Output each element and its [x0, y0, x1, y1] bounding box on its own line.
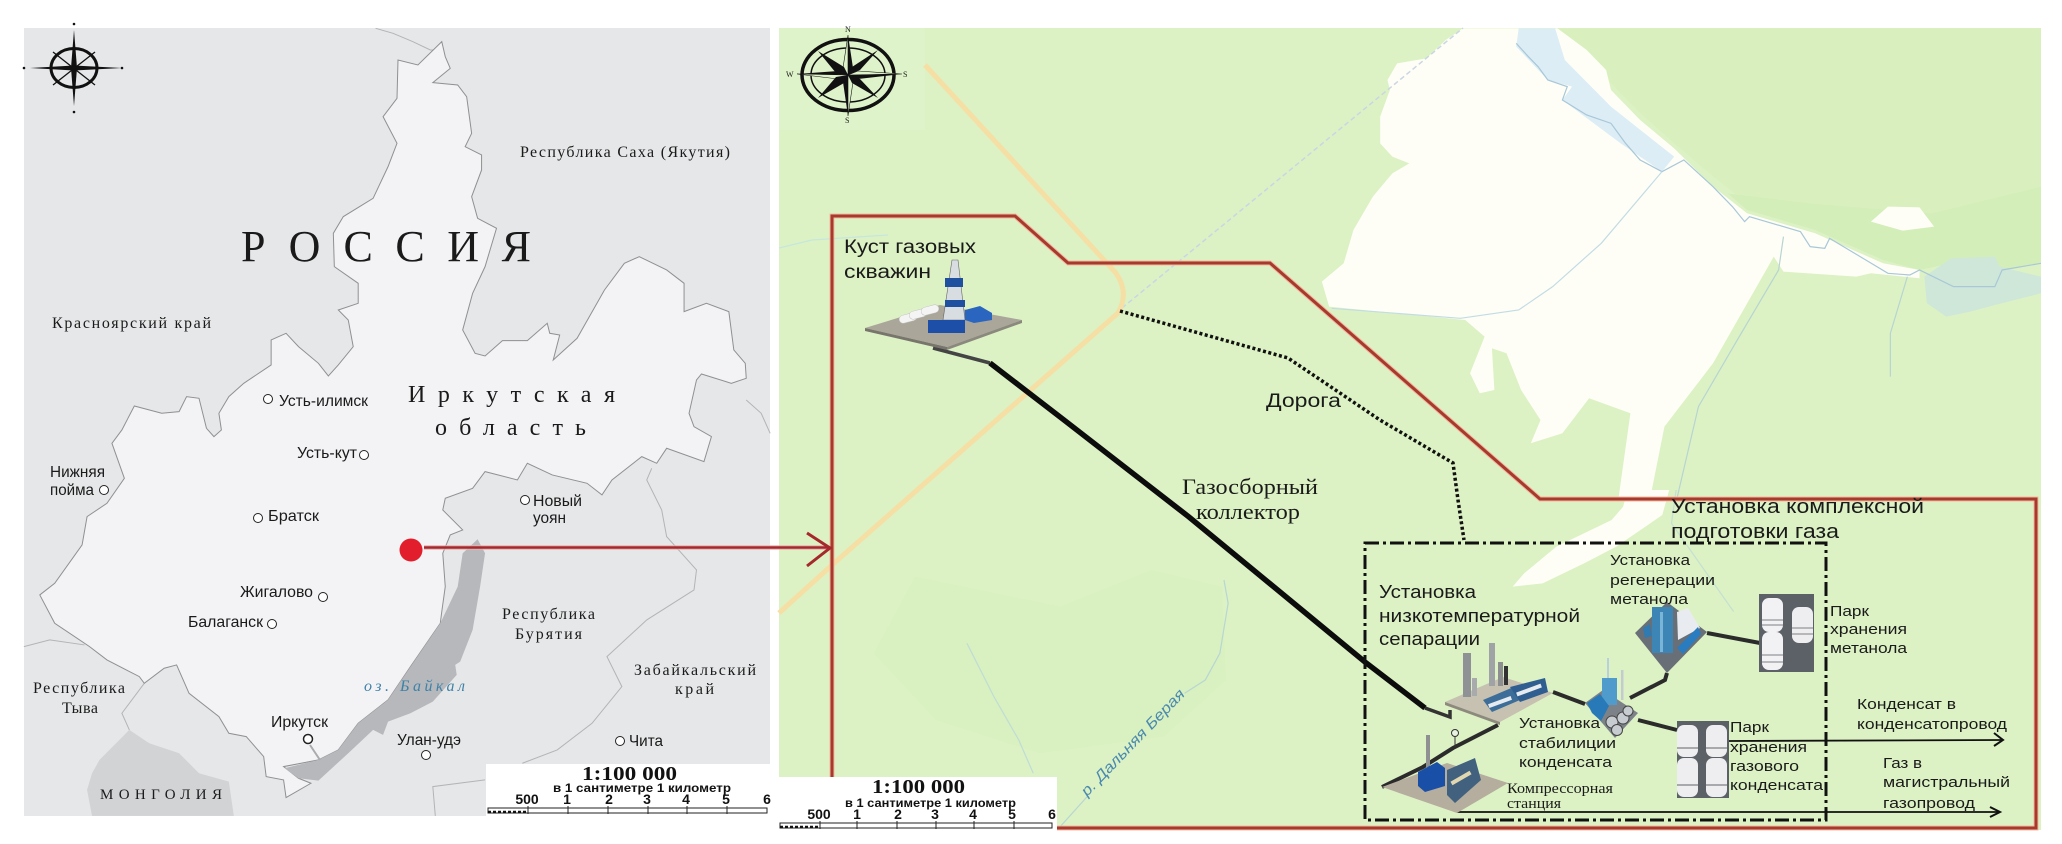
icon: low temperature separation unit: [1445, 643, 1553, 725]
city: Улан-удэ: [397, 732, 461, 760]
dash-dot boundary of gas treatment plant: [1365, 543, 1826, 820]
label: Парк хранения метанола: хранения: [1830, 621, 1907, 638]
compass rose: large: S: [845, 116, 849, 125]
scale: site map: 6: [1048, 806, 1056, 822]
label: Парк хранения газового конденсата: газового: [1730, 758, 1799, 775]
label: Установка комплексной подготовки газа: [1671, 496, 1924, 543]
label: Парк хранения метанола: метанола: [1830, 640, 1908, 657]
city: Новый уоян: [520, 493, 582, 527]
red boundary of licence area: [832, 216, 2036, 828]
city: Улан-удэ: Улан-удэ: [397, 732, 461, 749]
darker forest band along river: [1728, 187, 2041, 270]
city: Иркутск: Иркутск: [271, 714, 329, 731]
region: Mongolia: [87, 730, 234, 816]
scale: regional map: 1: [563, 791, 571, 807]
blue lake: [1516, 28, 1674, 172]
arrow: condensate export: [1729, 733, 2003, 746]
neighbouring borders: [24, 28, 770, 816]
compass rose: large: [786, 25, 907, 125]
compass rose: large: S: [903, 70, 907, 79]
gas gathering pipeline: [933, 348, 1450, 717]
region: Irkutsk oblast: [40, 42, 746, 798]
label: Бурятия: [502, 606, 595, 643]
scale: site map: 4: [969, 806, 977, 822]
label: Установка стабилизации конденсата: стабилиции: [1519, 735, 1616, 752]
city: Чита: [616, 733, 663, 750]
label: Тыва: [33, 680, 125, 717]
heading: Иркутская область: Иркутская: [408, 382, 615, 408]
label: Парк хранения метанола: [1830, 603, 1908, 657]
label: Компрессорная станция: станция: [1507, 796, 1561, 812]
label: Газ в магистральный газопровод: Газ в: [1883, 755, 1922, 772]
label: Парк хранения метанола: Парк: [1830, 603, 1869, 620]
label: Газ в магистральный газопровод: газопровод: [1883, 795, 1975, 812]
label: Парк хранения газового конденсата: [1730, 719, 1824, 794]
lighter patch behind compass: [779, 28, 925, 130]
label: Компрессорная станция: [1507, 781, 1613, 812]
label: Бурятия: Бурятия: [515, 626, 583, 643]
floodplain: lower part: [1513, 490, 1669, 587]
label: Газосборный коллектор: Газосборный: [1182, 474, 1318, 499]
label: Забайкальский край: Забайкальский: [634, 662, 756, 679]
map background: [24, 28, 770, 816]
label: Установка регенерации метанола: метанола: [1610, 591, 1689, 608]
scale: site map: 2: [894, 806, 902, 822]
label: Установка регенерации метанола: регенерации: [1610, 572, 1715, 589]
scale: regional map: 3: [643, 791, 651, 807]
scale: regional map: 6: [763, 791, 771, 807]
heading: Иркутская область: [408, 382, 615, 441]
label: Парк хранения газового конденсата: конденсата: [1730, 777, 1824, 794]
label: Компрессорная станция: Компрессорная: [1507, 781, 1613, 797]
darker forest area: [1558, 28, 2041, 270]
label: Установка стабилизации конденсата: [1519, 715, 1616, 771]
label: Куст газовых скважин: Куст газовых: [844, 237, 977, 258]
label: Установка комплексной подготовки газа: Установка комплексной: [1671, 496, 1924, 518]
city: Новый уоян: уоян: [533, 510, 566, 527]
scale: regional map: 2: [605, 791, 613, 807]
arrow: gas export: [1457, 807, 2000, 817]
scale: regional map: 1:100 000: [582, 763, 677, 785]
scale: site map: [779, 776, 1057, 844]
heading: Россия: РОССИЯ: [241, 222, 531, 271]
label: Тыва: Тыва: [62, 700, 98, 717]
label: Парк хранения газового конденсата: хранения: [1730, 739, 1807, 756]
label: река Дальняя Берая: р. Дальняя Берая: [1077, 686, 1189, 801]
label: Бурятия: Республика: [502, 606, 595, 623]
dotted road: [1120, 311, 1464, 540]
panel: detailed site map: [779, 25, 2041, 844]
scale: regional map: 5: [722, 791, 730, 807]
city: Усть-илимск: Усть-илимск: [279, 393, 369, 410]
label: Газ в магистральный газопровод: магистральный: [1883, 774, 2010, 791]
location marker with arrow to site map: [400, 533, 830, 566]
label: Куст газовых скважин: скважин: [844, 262, 931, 283]
icon: compressor station: [1382, 730, 1508, 813]
scale: site map: в 1 сантиметре 1 километр: [845, 798, 1016, 810]
panel: regional map: [23, 23, 770, 816]
label: Установка регенерации метанола: Установка: [1610, 552, 1691, 569]
wetland: [1924, 257, 2041, 317]
scale: site map: 5: [1008, 806, 1016, 822]
city: Усть-кут: Усть-кут: [297, 445, 358, 462]
city: Чита: Чита: [629, 733, 663, 750]
scale: regional map: в 1 сантиметре 1 километр: [553, 783, 731, 795]
icon: gas well cluster: [865, 260, 1022, 350]
label: Красноярский край: Красноярский край: [52, 315, 211, 332]
label: Газосборный коллектор: [1182, 474, 1318, 524]
icon: methanol regeneration unit: [1635, 602, 1707, 673]
icon: condensate storage tanks: [1677, 721, 1729, 798]
label: Тыва: Республика: [33, 680, 125, 697]
city: Новый уоян: Новый: [533, 493, 582, 510]
lake Baikal: [285, 539, 485, 781]
heading: Иркутская область: область: [435, 415, 586, 441]
label: Дорога: Дорога: [1266, 391, 1342, 412]
city: Нижняя пойма: пойма: [50, 482, 94, 499]
city: Нижняя пойма: Нижняя: [50, 464, 105, 481]
label: Установка стабилизации конденсата: конденсата: [1519, 754, 1613, 771]
city: Иркутск: [271, 714, 329, 760]
scale: regional map: 500: [515, 791, 539, 807]
label: Установка комплексной подготовки газа: подготовки газа: [1671, 521, 1840, 543]
label: Установка низкотемпературной сепарации: Установка: [1379, 582, 1477, 602]
label: Конденсат в конденсатопровод: [1857, 696, 2007, 733]
label: Монголия: МОНГОЛИЯ: [100, 787, 222, 803]
label: Конденсат в конденсатопровод: конденсатопровод: [1857, 716, 2007, 733]
label: Якутия: Республика Саха (Якутия): [520, 144, 730, 161]
label: Установка низкотемпературной сепарации: [1379, 582, 1580, 649]
compass rose: small: [23, 23, 123, 113]
label: Забайкальский край: [634, 662, 756, 698]
label: Установка регенерации метанола: [1610, 552, 1715, 608]
label: Конденсат в конденсатопровод: Конденсат в: [1857, 696, 1956, 713]
scale: site map: 1:100 000: [872, 776, 965, 798]
city: Жигалово: Жигалово: [240, 584, 313, 601]
green terrain background: [779, 28, 2041, 830]
small clearing: [1871, 207, 1934, 231]
city: Братск: Братск: [268, 508, 320, 525]
rivers: [779, 43, 2041, 827]
scale: site map: 1: [853, 806, 861, 822]
icon: methanol storage tanks: [1759, 594, 1814, 672]
label: Установка низкотемпературной сепарации: сепарации: [1379, 629, 1480, 649]
compass rose: large: N: [845, 25, 851, 34]
icon: condensate stabilization unit: [1585, 658, 1638, 738]
connecting pipes: [1382, 633, 1760, 787]
floodplain: white area: [1322, 28, 1920, 500]
label: Парк хранения газового конденсата: Парк: [1730, 719, 1769, 736]
orange highway: [779, 65, 1123, 613]
label: Забайкальский край: край: [675, 681, 714, 698]
label: озеро Байкал: оз. Байкал: [364, 678, 465, 695]
label: Установка низкотемпературной сепарации: низкотемпературной: [1379, 606, 1580, 626]
dashed power line: [1122, 28, 1463, 308]
label: Установка стабилизации конденсата: Установка: [1519, 715, 1601, 732]
darker forest patch south: [874, 570, 1226, 753]
city: Балаганск: Балаганск: [188, 614, 264, 631]
scale: site map: 500: [807, 806, 831, 822]
compass rose: large: W: [786, 70, 794, 79]
scale: regional map: 4: [682, 791, 690, 807]
label: Газосборный коллектор: коллектор: [1196, 499, 1300, 524]
label: Газ в магистральный газопровод: [1883, 755, 2010, 812]
scale: site map: 3: [931, 806, 939, 822]
scale: regional map: [486, 763, 771, 824]
city: Нижняя пойма: [50, 464, 108, 499]
label: Куст газовых скважин: [844, 237, 977, 283]
